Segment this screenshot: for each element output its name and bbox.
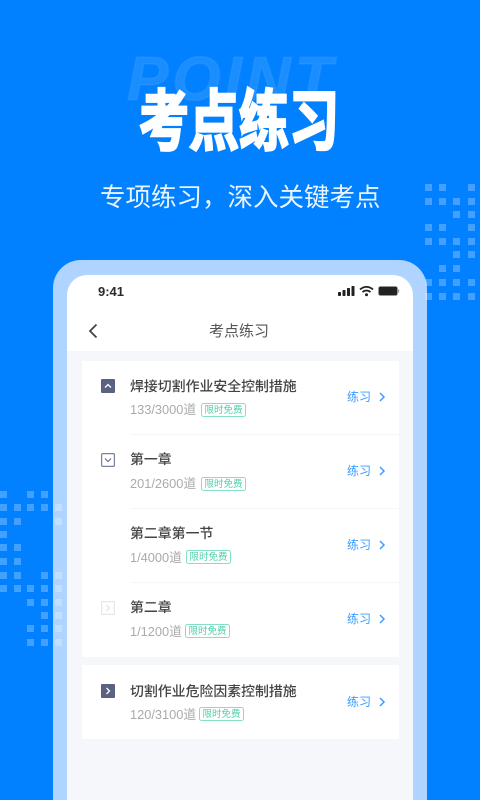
practice link: 练习 <box>347 612 371 626</box>
row title: 第一章 <box>130 451 172 467</box>
card 2 <box>82 665 399 739</box>
row 2 <box>101 451 385 491</box>
status bar icons <box>338 286 400 296</box>
chevron <box>380 392 385 402</box>
row count: 133/3000道 <box>130 402 196 417</box>
row 4 <box>101 599 385 639</box>
row 5 <box>101 683 385 722</box>
row 1 <box>101 378 385 417</box>
icon: collapse <box>101 379 115 393</box>
row title: 第二章第一节 <box>130 525 213 541</box>
subtitle: 专项练习，深入关键考点 <box>100 177 381 214</box>
chevron <box>380 614 385 624</box>
row count: 1/1200道 <box>130 624 182 639</box>
background word: POINT: POINT <box>127 45 336 114</box>
icon: disabled expand <box>101 601 115 615</box>
row title: 焊接切割作业安全控制措施 <box>130 378 297 394</box>
row title: 切割作业危险因素控制措施 <box>130 683 297 699</box>
chevron <box>380 466 385 476</box>
tag: 限时免费 <box>204 402 242 416</box>
row count: 201/2600道 <box>130 476 196 491</box>
practice link: 练习 <box>347 390 371 404</box>
row title: 第二章 <box>130 599 172 615</box>
phone screen <box>67 275 413 800</box>
practice link: 练习 <box>347 538 371 552</box>
nav title: 考点练习 <box>209 323 269 340</box>
back arrow <box>88 324 98 338</box>
dot pattern: left <box>0 491 62 646</box>
chevron <box>380 540 385 550</box>
icon: collapsed <box>101 684 115 698</box>
row 3 <box>130 525 385 565</box>
tag: 限时免费 <box>188 623 226 637</box>
card 1 <box>82 361 399 657</box>
practice link: 练习 <box>347 464 371 478</box>
tag: 限时免费 <box>189 549 228 563</box>
chevron <box>380 698 385 706</box>
tag: 限时免费 <box>204 476 242 490</box>
phone frame <box>53 260 427 800</box>
row count: 1/4000道 <box>130 550 182 565</box>
tag: 限时免费 <box>202 706 240 720</box>
dot pattern: right <box>425 184 475 300</box>
icon: expand <box>101 453 115 467</box>
row count: 120/3100道 <box>130 707 196 722</box>
practice link: 练习 <box>347 695 371 709</box>
title: 考点练习 <box>139 69 339 165</box>
status bar time: 9:41 <box>98 284 124 299</box>
list background <box>67 351 413 800</box>
